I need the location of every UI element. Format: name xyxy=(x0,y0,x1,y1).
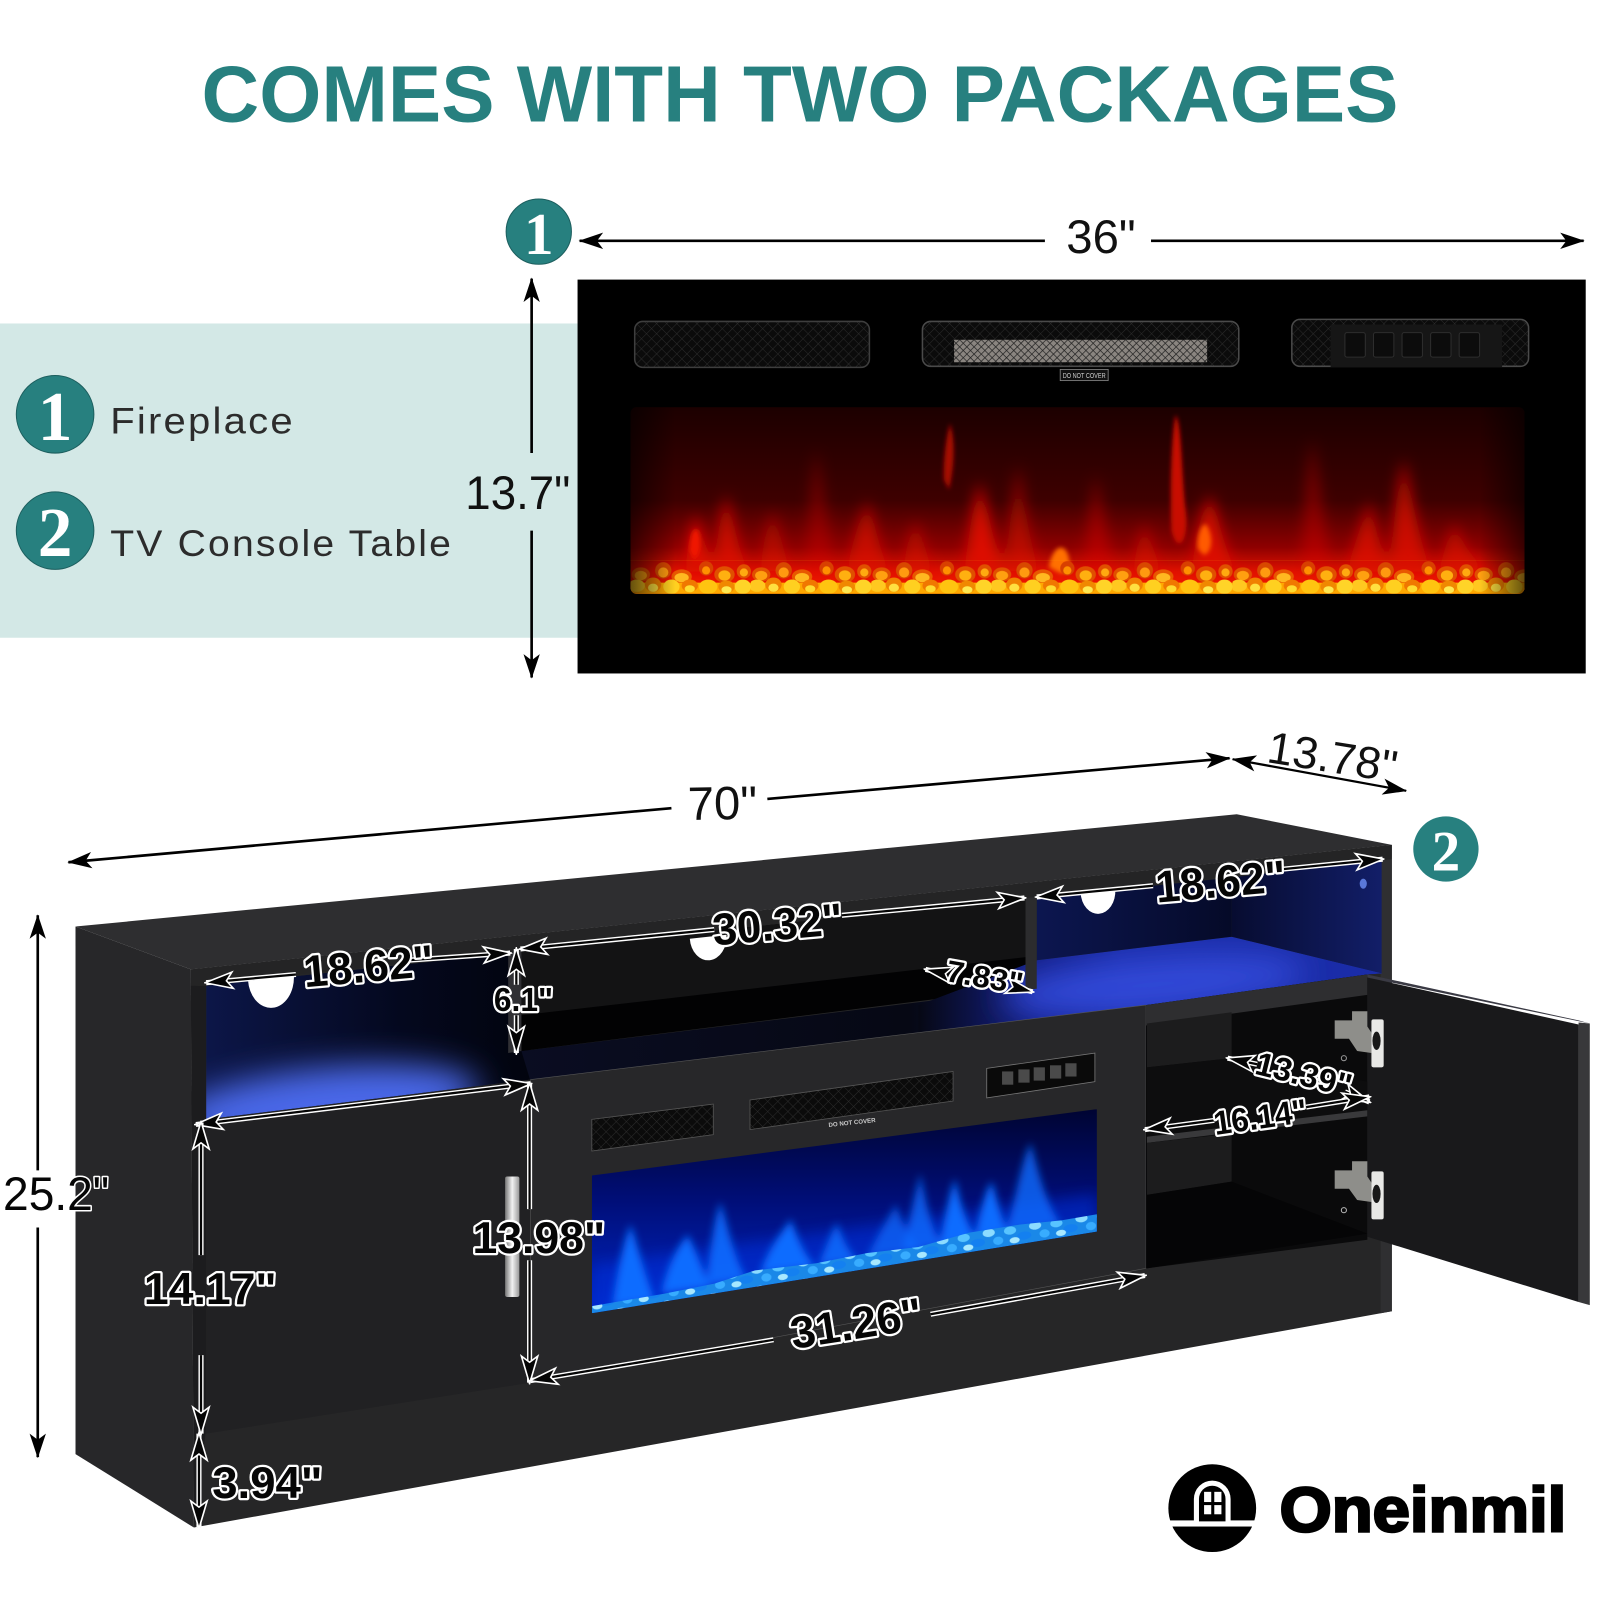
insert vent centre xyxy=(750,1071,953,1130)
insert label: DO NOT COVER xyxy=(828,1117,877,1129)
console left side xyxy=(76,927,194,1528)
left post xyxy=(191,986,206,1528)
logo mark xyxy=(1168,1464,1256,1552)
dimension: insert width 31.26: 31.26" xyxy=(787,1288,926,1359)
dimension: shelf width 16.14 xyxy=(1145,1093,1369,1143)
dimension: left cubby width 18.62 xyxy=(206,935,510,997)
dimension: right cubby width 18.62 xyxy=(1037,850,1383,913)
cable hole left xyxy=(248,976,294,1008)
hinge: lower xyxy=(1335,1161,1384,1219)
logo wordmark: Oneinmil xyxy=(1280,1476,1566,1546)
fireplace insert xyxy=(531,1005,1146,1383)
console front frame xyxy=(191,845,1392,1528)
cable hole right xyxy=(1081,890,1115,914)
badge 1: fireplace xyxy=(506,199,571,267)
badge 1: fireplace: 1 xyxy=(524,201,554,267)
hinge: upper xyxy=(1335,1011,1384,1067)
panel: package legend band xyxy=(0,323,578,638)
legend badge 2: 2 xyxy=(38,495,72,572)
dimension: console height 25.2 inches: 25.2" xyxy=(3,1168,109,1220)
open cubby: right xyxy=(918,860,1383,1033)
panel: electric fireplace xyxy=(578,280,1586,673)
legend badge 1: 1 xyxy=(38,379,72,456)
dimension: base height 3.94 xyxy=(199,1434,322,1528)
dimension: left cubby width 18.62: 18.62" xyxy=(301,935,436,997)
badge 2: console: 2 xyxy=(1432,820,1460,883)
dimension: centre cubby width 30.32 xyxy=(520,893,1024,955)
title: COMES WITH TWO PACKAGES xyxy=(202,49,1398,138)
dimension: fireplace height 13.7 inches: 13.7" xyxy=(465,467,570,519)
legend label: TV Console Table: TV Console Table xyxy=(110,523,453,564)
dimension: door width xyxy=(196,1084,531,1124)
dimension: insert width 31.26 xyxy=(531,1276,1145,1381)
dimension: base height 3.94: 3.94" xyxy=(212,1457,322,1508)
dimension: right cubby width 18.62: 18.62" xyxy=(1153,850,1288,913)
legend badge 1 xyxy=(16,376,94,456)
legend label: Fireplace: Fireplace xyxy=(110,401,295,442)
vent: heater xyxy=(922,321,1239,366)
dimension: console length 70 inches: 70" xyxy=(687,777,758,830)
insert vent left xyxy=(592,1104,713,1151)
warning label: DO NOT COVER xyxy=(1063,371,1106,380)
legend badge 2 xyxy=(16,492,94,572)
top slab front edge xyxy=(191,845,1392,986)
dimension: console length 70 inches xyxy=(68,758,1230,862)
open cubby: left xyxy=(206,956,530,1119)
vent: control panel with buttons xyxy=(1292,319,1529,367)
dimension: console depth 13.78 inches: 13.78" xyxy=(1264,722,1401,792)
open cubby: centre xyxy=(521,898,1146,1082)
dimension: cubby height 6.1: 6.1" xyxy=(494,982,553,1019)
right side post highlight xyxy=(1381,859,1392,1313)
dimension: shelf depth 13.39: 13.39" xyxy=(1252,1044,1356,1104)
dimension: shelf width 16.14: 16.14" xyxy=(1211,1093,1310,1143)
cable hole centre xyxy=(690,935,727,960)
cubby dividers xyxy=(508,897,1037,1053)
dimension: fireplace width 36 inches: 36" xyxy=(1066,211,1136,263)
led sensor xyxy=(1360,879,1367,889)
dimension: centre cubby width 30.32: 30.32" xyxy=(710,893,845,955)
vent: left xyxy=(635,321,869,367)
dimension: cubby depth 7.83: 7.83" xyxy=(944,954,1026,1001)
warning label xyxy=(1060,369,1108,381)
panel: TV console table xyxy=(76,814,1590,1528)
left door xyxy=(206,1080,531,1434)
dimension: door height 14.17: 14.17" xyxy=(144,1263,277,1314)
console top surface xyxy=(76,814,1392,969)
badge 2: console xyxy=(1413,816,1479,883)
insert control panel xyxy=(987,1053,1095,1098)
open right door xyxy=(1367,974,1590,1305)
blue flames and crystals xyxy=(592,1109,1097,1313)
dimension: cubby height 6.1 xyxy=(494,949,553,1053)
brand logo xyxy=(1168,1464,1566,1552)
door handle xyxy=(505,1177,519,1297)
dimension: insert height 13.98: 13.98" xyxy=(472,1212,605,1263)
red flames and ember bed xyxy=(631,407,1524,594)
right open compartment xyxy=(1146,974,1367,1268)
